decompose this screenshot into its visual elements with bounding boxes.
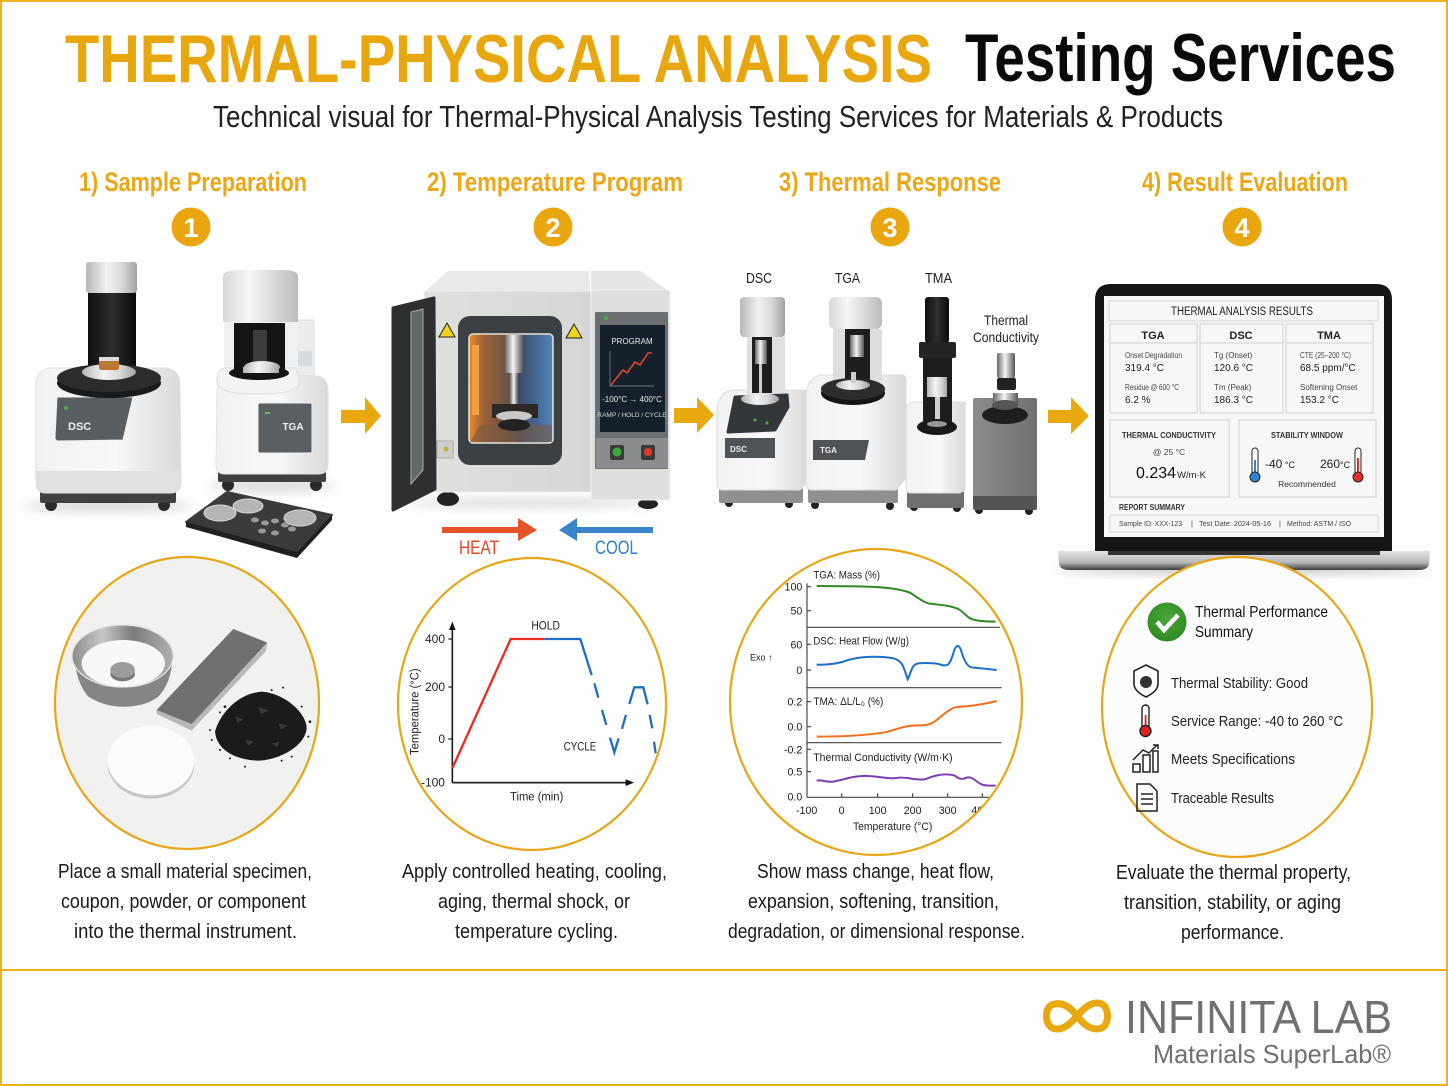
step 3 heading — [779, 167, 1001, 246]
thermal conductivity card — [1110, 420, 1229, 497]
chart text: 300 — [939, 805, 957, 817]
step 1 heading — [79, 167, 307, 246]
chart text: TGA: Mass (%) — [813, 570, 880, 582]
caption: step 4: transition, stability, or aging — [1124, 892, 1341, 914]
axis labels: Temperature (°C) — [407, 668, 421, 755]
report summary — [1110, 503, 1378, 532]
DSC column: DSC — [1229, 330, 1253, 342]
step 2 heading: 2 — [545, 213, 561, 243]
instrument labels: TMA — [925, 270, 952, 287]
laptop results report — [1057, 284, 1430, 573]
axis labels: -100 — [421, 775, 445, 789]
caption: step 3: degradation, or dimensional response. — [728, 921, 1025, 943]
circle 4: thermal performance summary — [1102, 557, 1372, 857]
report title — [1109, 301, 1378, 321]
chart text: 0.5 — [787, 767, 802, 779]
instrument: DSC benchtop: DSC — [68, 421, 91, 433]
report summary: Method: ASTM / ISO — [1287, 519, 1351, 528]
instrument: thermal chamber — [393, 271, 670, 510]
heat arrow: HEAT — [459, 538, 499, 559]
step 1 heading: 1) Sample Preparation — [79, 167, 307, 197]
instrument: DSC compact — [717, 297, 808, 508]
title: THERMAL-PHYSICAL ANALYSIS — [65, 21, 932, 97]
heat arrow — [442, 518, 537, 559]
subtitle: Technical visual for Thermal-Physical Analysis Testing Services for Materials & Products — [213, 99, 1223, 134]
ramp and hold heating line — [452, 639, 544, 768]
chart text: DSC: Heat Flow (W/g) — [813, 635, 909, 647]
caption: step 3: expansion, softening, transition, — [748, 891, 999, 913]
DSC column: Tm (Peak) — [1214, 383, 1252, 392]
chart text: 0 — [839, 805, 845, 817]
TMA column: CTE (25–200 °C) — [1300, 351, 1351, 360]
chart text: 0 — [796, 665, 802, 677]
TGA column: Onset Degradation — [1125, 351, 1182, 360]
chart text: -0.2 — [784, 744, 802, 756]
report title: THERMAL ANALYSIS RESULTS — [1171, 306, 1313, 318]
thermal conductivity card: THERMAL CONDUCTIVITY — [1122, 430, 1216, 440]
chart text — [750, 570, 989, 833]
chart text: 0.2 — [787, 697, 802, 709]
chart text: 60 — [790, 639, 802, 651]
step 2 heading — [427, 167, 683, 246]
TMA column — [1286, 324, 1373, 413]
caption: step 1: coupon, powder, or component — [61, 891, 306, 913]
report summary: REPORT SUMMARY — [1119, 503, 1186, 512]
arrow: step 3 to 4 — [1048, 397, 1089, 434]
summary heading: Summary — [1195, 624, 1253, 641]
thermal conductivity card: W/m·K — [1177, 470, 1207, 481]
TMA column: TMA — [1317, 330, 1341, 342]
report summary: | — [1191, 519, 1193, 528]
icon: thermometer — [1140, 705, 1151, 736]
step 2 heading: 2) Temperature Program — [427, 167, 683, 197]
step 3 heading: 3 — [882, 213, 898, 243]
instrument labels: Thermal — [984, 312, 1028, 328]
summary heading — [1195, 604, 1328, 641]
instrument labels: Conductivity — [973, 329, 1039, 345]
caption: step 4: Evaluate the thermal property, — [1116, 862, 1351, 884]
caption: step 4 — [1116, 862, 1351, 944]
chart text: 100 — [785, 582, 802, 594]
icon: infinity mark — [1046, 1003, 1108, 1029]
step 4 heading: 4 — [1234, 213, 1250, 243]
circle 3: thermal response charts — [730, 549, 1022, 855]
arrow: step 1 to 2 — [341, 397, 381, 434]
axis labels — [407, 619, 596, 803]
chart text: 400 — [971, 805, 989, 817]
chart text: Exo ↑ — [750, 653, 773, 663]
instrument: thermal chamber: PROGRAM — [611, 337, 653, 346]
stability window card: -40 °C — [1265, 457, 1295, 471]
caption: step 1: into the thermal instrument. — [74, 921, 297, 943]
TGA column: 6.2 % — [1125, 395, 1151, 406]
caption: step 2 — [402, 861, 667, 943]
TGA column — [1110, 324, 1197, 413]
cooling line — [544, 639, 592, 675]
stability window card: STABILITY WINDOW — [1271, 430, 1344, 440]
metal coupon bar — [157, 629, 267, 731]
circle 4: thermal performance summary: Thermal Stability: Good — [1171, 675, 1308, 692]
report summary: | — [1279, 519, 1281, 528]
instrument: TGA compact — [806, 297, 906, 510]
step 4 heading — [1142, 167, 1348, 246]
DSC column: 186.3 °C — [1214, 395, 1253, 406]
instrument: thermal chamber: -100°C → 400°C — [602, 395, 662, 404]
DSC column — [1200, 324, 1283, 413]
chart text: 50 — [790, 606, 802, 618]
TGA column: 319.4 °C — [1125, 363, 1164, 374]
instrument: TGA compact: TGA — [820, 446, 837, 455]
caption: step 2: Apply controlled heating, cooling, — [402, 861, 667, 883]
step 4 heading: 4) Result Evaluation — [1142, 167, 1348, 197]
thermal conductivity curve — [817, 774, 996, 786]
sample tray — [186, 492, 332, 558]
stability window card: 260°C — [1320, 457, 1351, 471]
chart text: -100 — [796, 805, 817, 817]
axes and dividers — [807, 583, 1002, 797]
circle 2: temperature program chart — [398, 558, 666, 850]
icon: document — [1137, 784, 1157, 811]
report summary: Sample ID: XXX-123 — [1119, 519, 1182, 528]
thermal cycling line — [594, 683, 656, 753]
chart text: TMA: ΔL/L₀ (%) — [813, 696, 883, 708]
caption: step 3: Show mass change, heat flow, — [757, 861, 994, 883]
chart text: 0.0 — [787, 722, 802, 734]
axis labels: HOLD — [531, 619, 560, 633]
logo: Infinita Lab: INFINITA LAB — [1125, 991, 1392, 1043]
cool arrow — [559, 518, 653, 559]
chart text: Temperature (°C) — [853, 821, 932, 833]
thermal conductivity card: 0.234 — [1136, 465, 1176, 482]
TGA column: Residue @ 600 °C — [1125, 383, 1179, 392]
logo: Infinita Lab: Materials SuperLab® — [1153, 1039, 1391, 1069]
instrument labels: TGA — [835, 270, 860, 287]
cool arrow: COOL — [595, 538, 638, 559]
axis labels: 0 — [438, 732, 445, 746]
arrow: step 2 to 3 — [674, 397, 714, 433]
caption: step 3 — [728, 861, 1025, 943]
chart text: 100 — [869, 805, 887, 817]
axes — [448, 622, 634, 786]
axis labels: Time (min) — [510, 789, 563, 803]
instrument labels — [746, 270, 1039, 345]
caption: step 2: aging, thermal shock, or — [438, 891, 630, 913]
axis labels: 200 — [425, 680, 445, 694]
caption: step 2: temperature cycling. — [455, 921, 618, 943]
instrument: thermal chamber: RAMP / HOLD / CYCLE — [597, 412, 667, 419]
sample pan — [72, 625, 173, 707]
TMA column: 153.2 °C — [1300, 395, 1339, 406]
TMA column: 68.5 ppm/°C — [1300, 363, 1356, 374]
axis labels: CYCLE — [564, 739, 596, 753]
circle 4: thermal performance summary: Service Range: -40 to 260 °C — [1171, 713, 1343, 730]
circle 4: thermal performance summary: Traceable Results — [1171, 790, 1274, 807]
chart text: Thermal Conductivity (W/m·K) — [813, 752, 953, 764]
laptop bezel — [1095, 284, 1392, 552]
instrument: TGA benchtop: TGA — [282, 422, 304, 433]
report summary: Test Date: 2024-05-16 — [1199, 519, 1271, 528]
stability window card: Recommended — [1278, 479, 1336, 489]
instrument: TMA — [906, 297, 965, 512]
stability window card — [1239, 420, 1376, 497]
summary heading: Thermal Performance — [1195, 604, 1328, 621]
DSC column: Tg (Onset) — [1214, 351, 1253, 360]
TMA column: Softening Onset — [1300, 383, 1358, 392]
chart text: 0.0 — [787, 792, 802, 804]
caption: step 4: performance. — [1181, 922, 1284, 944]
logo: Infinita Lab — [1046, 991, 1392, 1069]
DSC column: 120.6 °C — [1214, 363, 1253, 374]
TMA expansion curve — [817, 701, 997, 737]
instrument: DSC compact: DSC — [730, 445, 747, 454]
icon: shield — [1134, 665, 1158, 697]
instrument labels: DSC — [746, 270, 772, 287]
chamber door — [393, 298, 435, 510]
instrument: DSC benchtop — [23, 262, 193, 511]
axis labels: 400 — [425, 632, 445, 646]
white disc — [108, 726, 194, 799]
powder pile — [209, 687, 311, 768]
chart text: 200 — [904, 805, 922, 817]
DSC heat flow curve — [817, 646, 997, 679]
caption: step 1 — [58, 861, 312, 943]
caption: step 1: Place a small material specimen, — [58, 861, 312, 883]
icon: growth chart — [1133, 745, 1158, 772]
TGA mass curve — [817, 586, 996, 622]
instrument: thermal conductivity — [973, 353, 1037, 515]
thermal conductivity card: @ 25 °C — [1153, 447, 1185, 457]
circle 1: sample specimens — [55, 557, 319, 849]
instrument: TGA benchtop — [210, 270, 334, 491]
step 1 heading: 1 — [183, 213, 199, 243]
icon: green check — [1148, 602, 1186, 642]
circle 4: thermal performance summary: Meets Specifications — [1171, 751, 1295, 768]
TGA column: TGA — [1141, 330, 1165, 342]
step 3 heading: 3) Thermal Response — [779, 167, 1001, 197]
